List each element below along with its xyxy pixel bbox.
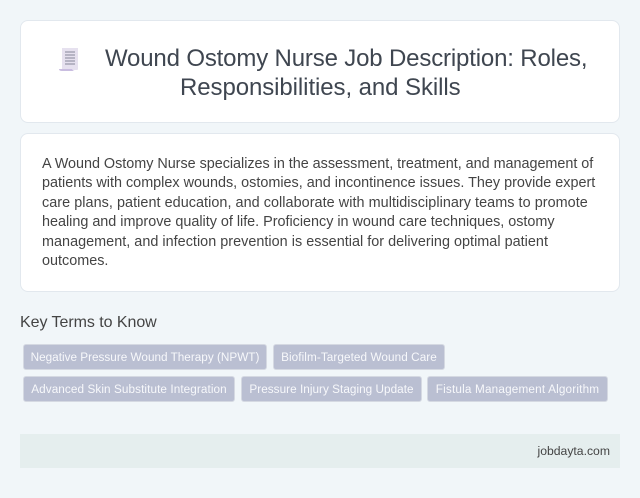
tag: biofilm <box>273 344 445 370</box>
tag: skin substitute <box>23 376 235 402</box>
key terms heading: Key Terms to Know <box>20 314 157 331</box>
title line 2: Responsibilities, and Skills <box>180 74 461 101</box>
description line 1: A Wound Ostomy Nurse specializes in the assessment, treatment, and management of <box>42 156 593 172</box>
tag: fistula <box>427 376 608 402</box>
title line 1: Wound Ostomy Nurse Job Description: Roles, <box>105 45 587 72</box>
tag: skin substitute: Advanced Skin Substitute Integration <box>31 383 227 396</box>
description line 2: patients with complex wounds, ostomies, and incontinence issues. They provide expert <box>42 175 595 191</box>
tag: pressure injury: Pressure Injury Staging Update <box>249 383 414 396</box>
description line 4: healing and improve quality of life. Proficiency in wound care techniques, ostomy <box>42 214 555 230</box>
tag: fistula: Fistula Management Algorithm <box>436 383 599 396</box>
tag: pressure injury <box>241 376 422 402</box>
tag: NPWT <box>23 344 267 370</box>
description line 3: care plans, patient education, and collaborate with multidisciplinary teams to promote <box>42 195 588 211</box>
footer source text: jobdayta.com <box>538 444 610 458</box>
description line 6: outcomes. <box>42 253 108 269</box>
tag: NPWT: Negative Pressure Wound Therapy (NPWT) <box>31 351 259 364</box>
tag: biofilm: Biofilm-Targeted Wound Care <box>281 351 437 364</box>
description line 5: management, and infection prevention is essential for delivering optimal patient <box>42 234 548 250</box>
icon: document scroll <box>59 48 78 71</box>
header card <box>20 20 620 123</box>
description card <box>20 133 620 292</box>
footer bar <box>20 434 620 468</box>
